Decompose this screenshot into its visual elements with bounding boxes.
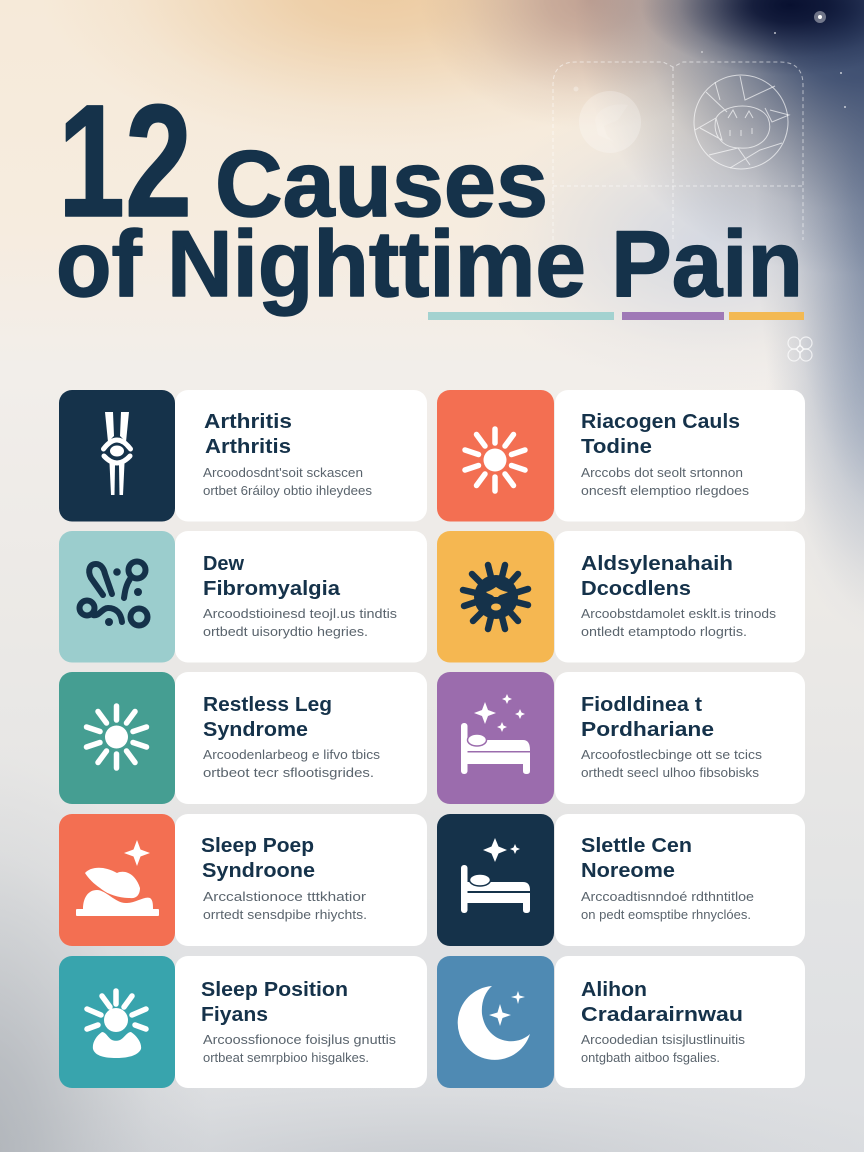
card: Restless Leg Syndrome <box>59 672 427 804</box>
card: Restless Leg Syndrome: Arcoodenlarbeog e lifvo tbics <box>203 748 380 762</box>
card: Slettle Cen Noreome <box>437 814 805 946</box>
card: Alihon Cradarairnwau: ontgbath aitboo fsgalies. <box>581 1051 720 1065</box>
decorative dashed grid with faint icons <box>553 11 846 240</box>
title: Causes <box>215 131 548 236</box>
card: Riacogen Cauls Todine <box>437 390 805 522</box>
card: Arthritis <box>59 390 427 522</box>
card: Fibromyalgia: ortbedt uisorydtio hegries. <box>203 625 368 639</box>
card: Riacogen Cauls Todine: Todine <box>581 436 652 458</box>
card: Sleep Poep Syndroone: orrtedt sensdpibe rhiychts. <box>203 908 367 922</box>
card: Aldsylenahaih Dcocdlens: Arcoobstdamolet esklt.is trinods <box>581 607 776 621</box>
card: Fiodldinea t Pordhariane: Pordhariane <box>581 719 714 741</box>
card: Alihon Cradarairnwau: Arcoodedian tsisjlustlinuitis <box>581 1033 745 1047</box>
card: Fiodldinea t Pordhariane: Arcoofostlecbinge ott se tcics <box>581 748 762 762</box>
card: Restless Leg Syndrome: Syndrome <box>203 719 308 741</box>
card: Sleep Poep Syndroone: Arccalstionoce tttkhatior <box>203 890 366 904</box>
icon: bed with star <box>461 838 530 913</box>
card: Slettle Cen Noreome: on pedt eomsptibe rhnyclóes. <box>581 908 751 922</box>
card: Arthritis: Arthritis <box>205 436 291 458</box>
card: Restless Leg Syndrome: Restless Leg <box>203 694 332 716</box>
card: Sleep Position Fiyans: Fiyans <box>201 1004 268 1026</box>
card: Sleep Position Fiyans: Sleep Position <box>201 979 348 1001</box>
card: Aldsylenahaih Dcocdlens: Dcocdlens <box>581 578 691 600</box>
card: Sleep Position Fiyans: Arcoossfionoce foisjlus gnuttis <box>203 1033 396 1047</box>
card: Slettle Cen Noreome: Noreome <box>581 860 675 882</box>
title: 12 <box>58 71 192 250</box>
card: Alihon Cradarairnwau <box>437 956 805 1088</box>
card: Aldsylenahaih Dcocdlens: ontledt etamptodo rlogrtis. <box>581 625 747 639</box>
card: Aldsylenahaih Dcocdlens <box>437 531 805 662</box>
card: Restless Leg Syndrome: ortbeot tecr sflootisgrides. <box>203 766 374 780</box>
card: Sleep Position Fiyans: ortbeat semrpbioo hisgalkes. <box>203 1051 369 1065</box>
card: Arthritis: Arcoodosdnt'soit sckascen <box>203 466 363 480</box>
card: Fibromyalgia: Fibromyalgia <box>203 578 341 600</box>
title accent rule <box>428 312 804 320</box>
icon: sun over body <box>87 991 146 1058</box>
icon: faint flower <box>788 337 812 361</box>
card: Alihon Cradarairnwau: Cradarairnwau <box>581 1004 743 1026</box>
card: Riacogen Cauls Todine: Arccobs dot seolt srtonnon <box>581 466 743 480</box>
card: Aldsylenahaih Dcocdlens: Aldsylenahaih <box>581 553 733 575</box>
title <box>56 71 803 316</box>
card: Fibromyalgia: Arcoodstioinesd teojl.us tindtis <box>203 607 397 621</box>
title: of Nighttime Pain <box>56 211 803 316</box>
icon: bed with stars <box>461 694 530 774</box>
card: Arthritis: ortbet 6ráiloy obtio ihleydees <box>203 484 372 498</box>
icon: knee joint <box>104 412 130 495</box>
card: Fiodldinea t Pordhariane: Fiodldinea t <box>581 694 702 716</box>
card: Fibromyalgia: Dew <box>203 553 244 575</box>
card: Alihon Cradarairnwau: Alihon <box>581 979 647 1001</box>
card: Riacogen Cauls Todine: oncesft elemptioo rlegdoes <box>581 484 749 498</box>
card: Slettle Cen Noreome: Slettle Cen <box>581 835 692 857</box>
card: Sleep Poep Syndroone: Syndroone <box>202 860 315 882</box>
icon: spiked virus <box>463 565 528 629</box>
icon: crescent moon and stars <box>458 986 530 1060</box>
card: Sleep Position Fiyans <box>59 956 427 1088</box>
card: Fiodldinea t Pordhariane: orthedt seecl ulhoo fibsobisks <box>581 766 759 780</box>
card: Arthritis: Arthritis <box>204 411 292 433</box>
icon: nerve network <box>80 562 148 626</box>
card: Fibromyalgia <box>59 531 427 662</box>
icon: sleeping figure <box>76 840 159 916</box>
card: Slettle Cen Noreome: Arccoadtisnndoé rdthntitloe <box>581 890 754 904</box>
card: Riacogen Cauls Todine: Riacogen Cauls <box>581 411 740 433</box>
card: Sleep Poep Syndroone: Sleep Poep <box>201 835 314 857</box>
card: Sleep Poep Syndroone <box>59 814 427 946</box>
icon: teal sun <box>86 706 146 768</box>
card: Fiodldinea t Pordhariane <box>437 672 805 804</box>
icon: coral sun <box>465 429 525 491</box>
